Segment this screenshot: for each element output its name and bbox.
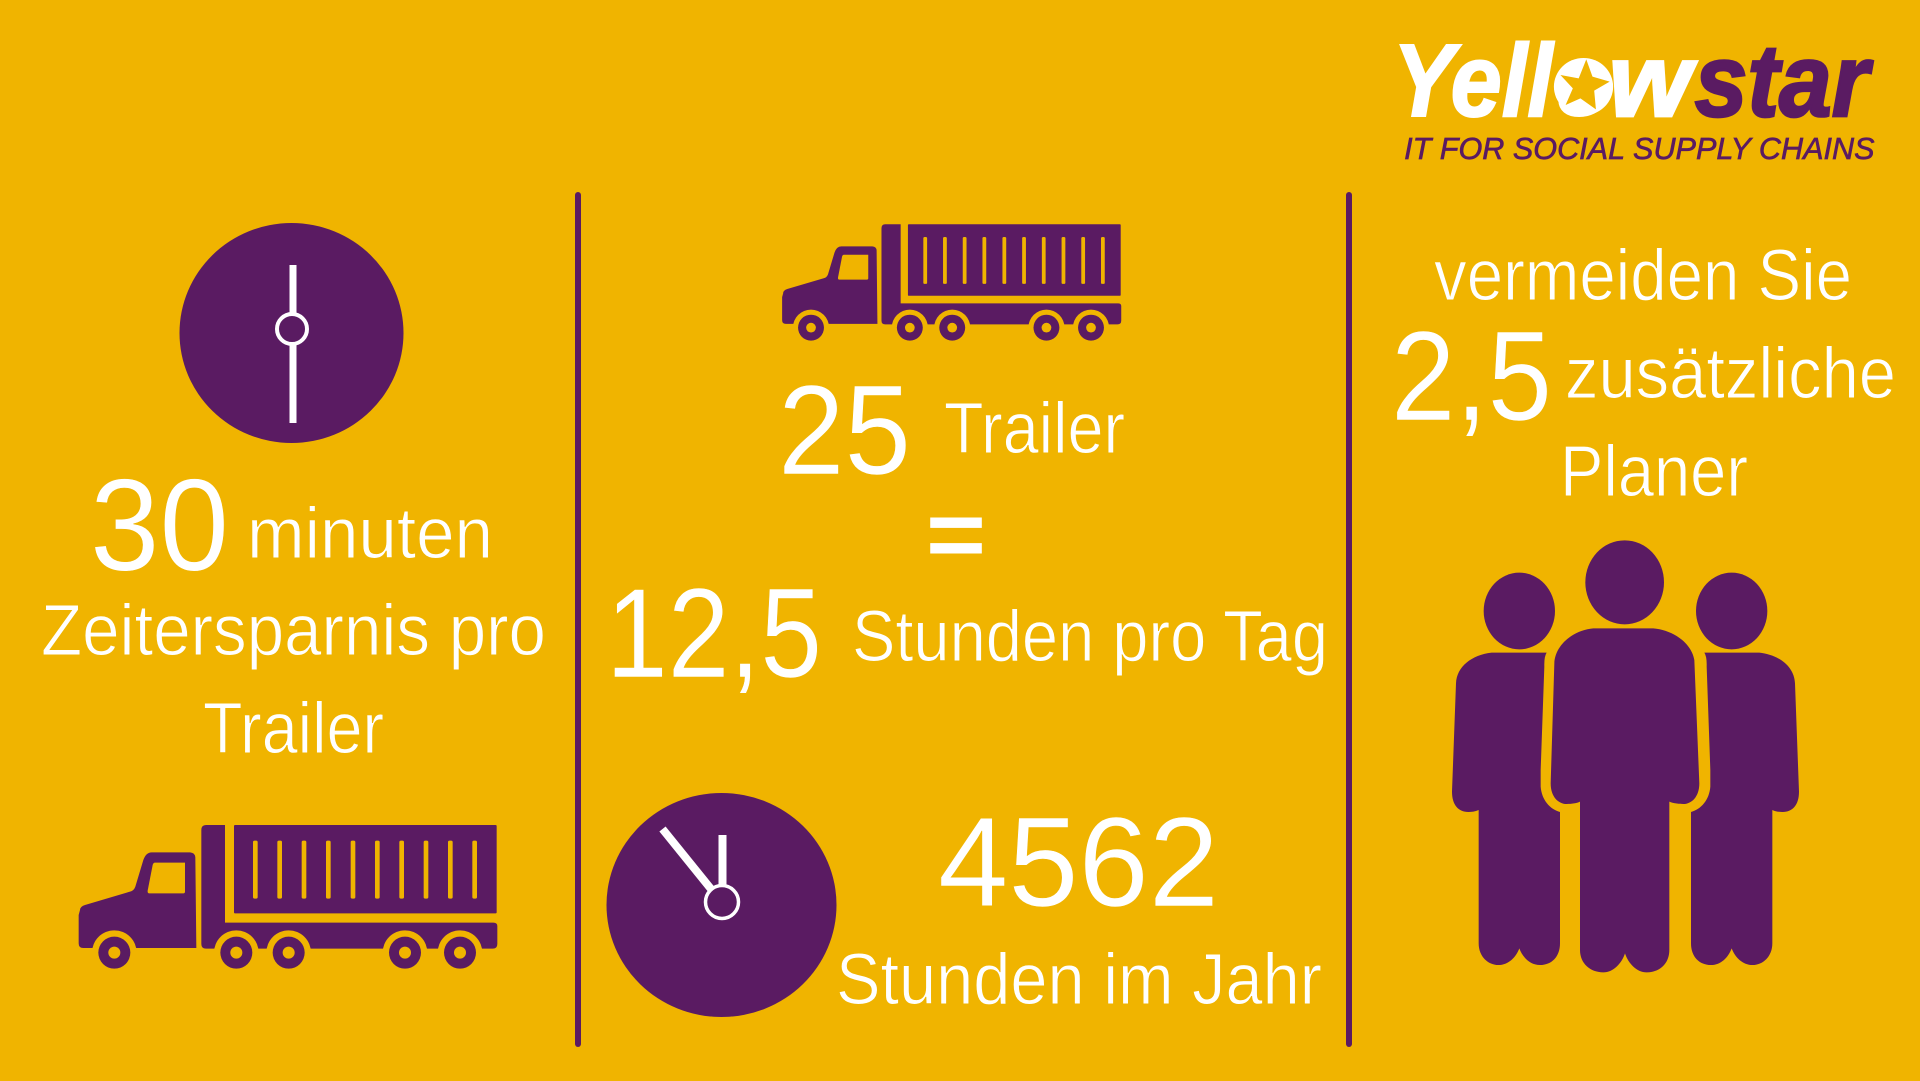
logo wordmark: o (1556, 44, 1611, 134)
number: 4562: 4562 (938, 791, 1219, 933)
icon: three people (1452, 540, 1799, 972)
logo wordmark: w (1609, 24, 1698, 139)
number: 12,5: 12,5 (606, 562, 822, 704)
number: 2,5: 2,5 (1391, 305, 1552, 447)
logo wordmark: star (1695, 24, 1873, 139)
equals sign: = (926, 481, 986, 588)
number: 30: 30 (90, 451, 229, 598)
logo wordmark (1393, 24, 1873, 139)
icon: clock showing 30 minutes (180, 223, 404, 443)
panel: left column, time saving (41, 223, 546, 975)
panel: right column, planners avoided (1391, 236, 1896, 972)
icon: small truck (782, 224, 1121, 346)
label: Stunden pro Tag: Stunden pro Tag (852, 597, 1328, 677)
panel: middle column, trailers and hours (606, 224, 1328, 1020)
icon: large truck (79, 825, 497, 975)
text: Zeitersparnis pro: Zeitersparnis pro (41, 591, 546, 671)
logo wordmark: Yell (1393, 24, 1554, 139)
label: Trailer: Trailer (944, 389, 1125, 469)
label: minuten: minuten (247, 494, 493, 574)
label: zusätzliche: zusätzliche (1565, 334, 1896, 414)
label: Stunden im Jahr: Stunden im Jahr (836, 940, 1322, 1020)
logo tagline: IT FOR SOCIAL SUPPLY CHAINS (1404, 130, 1875, 166)
number: 25: 25 (778, 359, 911, 501)
icon: clock (606, 793, 836, 1017)
label: Planer: Planer (1560, 432, 1748, 512)
text: Trailer: Trailer (203, 689, 384, 769)
logo: Yellowstar (1393, 24, 1875, 166)
text: vermeiden Sie: vermeiden Sie (1434, 236, 1852, 316)
